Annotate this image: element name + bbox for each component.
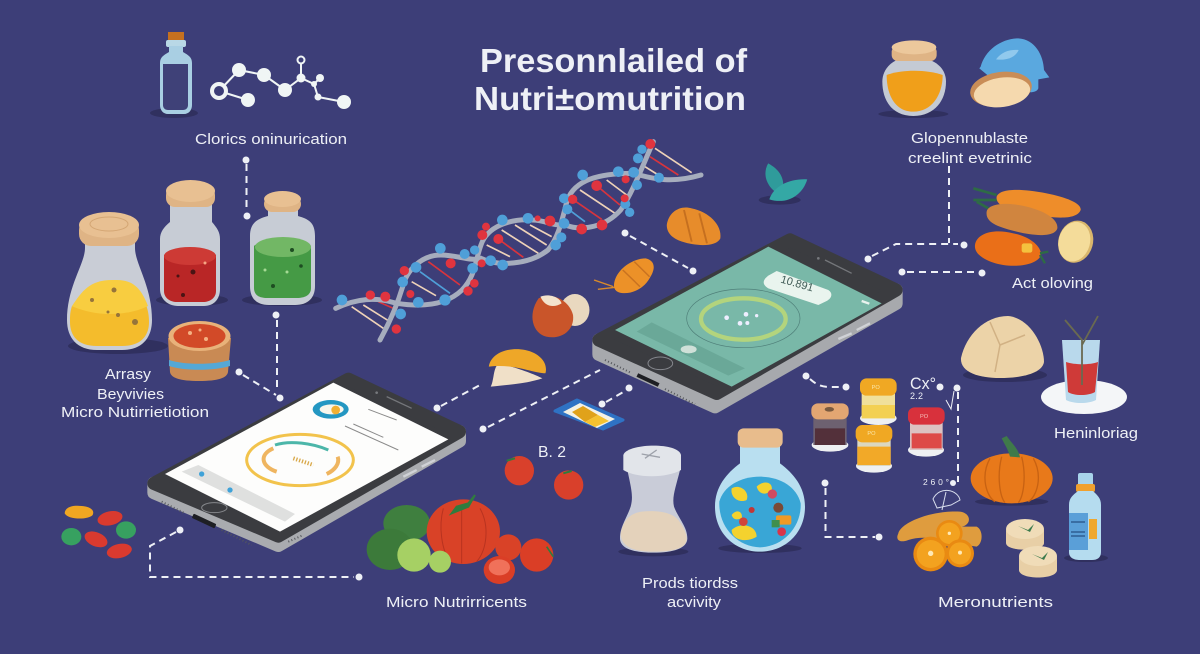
jar: red: PO [920, 414, 929, 420]
app footer band [637, 322, 745, 376]
app pill: 10.891 [779, 274, 815, 294]
label: prods: acvivity [667, 594, 722, 611]
label: glopennublaste [908, 130, 1033, 167]
icon: wooden bowl [168, 321, 231, 381]
icon: round flask with foods [715, 428, 805, 553]
label: act oloving: Act oloving [1012, 275, 1093, 292]
label: cx: 2.2 [910, 391, 923, 401]
label: glopennublaste: creelint evetrinic [908, 150, 1033, 167]
icon: carrots and slice [973, 188, 1098, 267]
connector: vertical to meronutrients [936, 384, 960, 486]
connector: phone to jars [802, 372, 850, 390]
icon: sweet potato and orange slices [897, 512, 982, 571]
connector: clorics [242, 156, 250, 220]
jar: dark with cork [811, 403, 849, 452]
connector: DNA to phone [622, 230, 696, 274]
label: small temperature note and sketch [923, 477, 960, 510]
label: arrasy: Micro Nutirrietiotion [61, 404, 209, 421]
icon: molecule [212, 56, 351, 109]
icon: orange honey jar [878, 40, 948, 118]
icon: loose tomatoes [505, 456, 583, 500]
title [474, 42, 748, 117]
icon: yellow flask [67, 212, 168, 354]
label: heninloriag: Heninloriag [1054, 425, 1138, 442]
label: small temperature note and sketch: 260° [923, 477, 949, 487]
icon: sim card [555, 400, 623, 429]
connector: white phone to mushroom [434, 385, 480, 412]
connector: green bottle to phone [236, 312, 284, 402]
connector: white phone to micronutrients [150, 526, 362, 580]
title: Presonnlailed of [480, 42, 748, 79]
icon: shaker [618, 446, 688, 556]
icon: mushroom [489, 349, 546, 387]
icon: nuts [532, 294, 589, 337]
label: arrasy: Beyvivies [97, 386, 164, 403]
label: prods [642, 575, 738, 611]
icon: red bottle [156, 180, 228, 306]
small jars group [811, 378, 945, 473]
phone: white app [154, 379, 459, 545]
connector: sim card to phone [480, 370, 632, 432]
jar: yellow lower: PO [867, 431, 876, 437]
connector: right of teal phone [864, 166, 986, 276]
icon: blue dome with bread [968, 38, 1049, 111]
label: micronutrients: Micro Nutrirricents [386, 594, 527, 611]
label: meronutrients: Meronutrients [938, 594, 1053, 611]
icon: green bottle [242, 191, 322, 306]
icon: pumpkin [971, 436, 1053, 506]
label: arrasy: Arrasy [105, 366, 152, 383]
icon: beans [61, 506, 136, 560]
label: b2: B. 2 [538, 444, 566, 461]
label: glopennublaste: Glopennublaste [911, 130, 1028, 147]
icon: teal leaf [759, 163, 807, 205]
icon: orange root [594, 258, 654, 293]
label: arrasy [61, 366, 209, 421]
icon: biscuits [1006, 519, 1057, 578]
label: prods: Prods tiordss [642, 575, 738, 592]
icon: orange bread [667, 207, 721, 245]
phone: teal app [599, 240, 896, 407]
label: cx [910, 374, 936, 401]
icon: beige stone [961, 316, 1047, 382]
connector: flask to slices [822, 480, 882, 540]
icon: glass with branch on plate [1041, 316, 1127, 414]
icon: blue medicine bottle [1064, 473, 1108, 562]
jar: yellow top: PO [872, 385, 880, 391]
label: clorics: Clorics oninurication [195, 131, 347, 148]
title: Nutri±omutrition [474, 80, 746, 117]
icon: empty glass bottle [150, 32, 198, 118]
icon: tomatoes and greens [367, 495, 553, 584]
app pill [764, 271, 831, 305]
label: cx: Cx° [910, 374, 936, 393]
DNA helix [336, 139, 701, 340]
